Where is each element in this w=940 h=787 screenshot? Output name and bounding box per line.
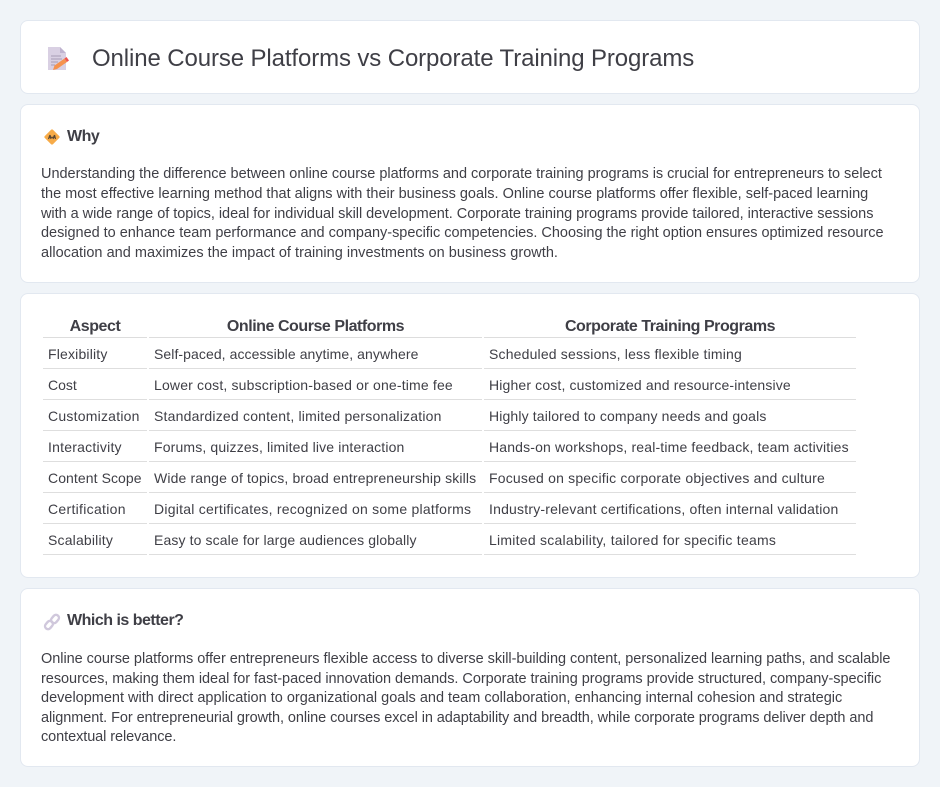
comparison table: Higher cost, customized and resource-intensive xyxy=(489,377,791,393)
comparison table: Customization xyxy=(48,408,140,424)
comparison table: Industry-relevant certifications, often internal validation xyxy=(489,501,839,517)
comparison table: Cost xyxy=(48,377,77,393)
comparison table: Interactivity xyxy=(48,439,122,455)
comparison table: Flexibility xyxy=(48,346,108,362)
comparison table: Focused on specific corporate objectives and culture xyxy=(489,470,825,486)
text block: which is better xyxy=(41,651,890,745)
panel: header xyxy=(20,20,920,94)
comparison table: Highly tailored to company needs and goals xyxy=(489,408,766,424)
comparison table: Wide range of topics, broad entrepreneurship skills xyxy=(154,470,476,486)
text block: which is better: alignment. For entrepreneurial growth, online courses excel in adaptability and breadth, while corporate programs deliver depth and xyxy=(41,710,873,726)
comparison table: Scheduled sessions, less flexible timing xyxy=(489,346,742,362)
text block: why: Understanding the difference between online course platforms and corporate training programs is crucial for entrepreneurs to select xyxy=(41,166,882,182)
title: Online Course Platforms vs Corporate Training Programs xyxy=(92,45,694,72)
comparison table: Online Course Platforms xyxy=(227,318,404,335)
comparison table: Hands-on workshops, real-time feedback, team activities xyxy=(489,439,849,455)
comparison table: Lower cost, subscription-based or one-time fee xyxy=(154,377,453,393)
comparison table: Content Scope xyxy=(48,470,142,486)
panel: comparison table xyxy=(20,293,920,578)
comparison table: Aspect xyxy=(70,318,120,335)
text block: why: allocation and maximizes the impact of training investments on business growth. xyxy=(41,245,558,261)
panel: why xyxy=(20,104,920,283)
comparison table: Limited scalability, tailored for specific teams xyxy=(489,532,776,548)
text block: why: with a wide range of topics, ideal for individual skill development. Corporate training programs provide tailored, interactive sessions xyxy=(41,206,873,222)
text block: which is better: resources, making them ideal for fast-paced innovation demands. Corporate training programs provide structured, company-specific xyxy=(41,671,881,687)
comparison table: Self-paced, accessible anytime, anywhere xyxy=(154,346,418,362)
comparison table: Corporate Training Programs xyxy=(565,318,775,335)
text block: why: the most effective learning method that aligns with their business goals. Online course platforms offer flexible, self-paced learning xyxy=(41,186,868,202)
comparison table: Certification xyxy=(48,501,126,517)
icon: diamond sign xyxy=(44,129,60,145)
comparison table: Easy to scale for large audiences globally xyxy=(154,532,417,548)
comparison table: Scalability xyxy=(48,532,113,548)
text block: why: designed to enhance team performance and company-specific competencies. Choosing the right option ensures optimized resource xyxy=(41,225,884,241)
heading: why: Why xyxy=(67,128,99,145)
icon: document with pencil xyxy=(48,47,69,70)
text block: which is better: development with direct application to organizational goals and team collaboration, enhancing internal cohesion and strategic xyxy=(41,690,842,706)
comparison table: Digital certificates, recognized on some platforms xyxy=(154,501,471,517)
panel: which is better xyxy=(20,588,920,767)
comparison table: Standardized content, limited personalization xyxy=(154,408,442,424)
icon: link xyxy=(44,614,60,630)
text block: which is better: contextual relevance. xyxy=(41,729,176,745)
text block: which is better: Online course platforms offer entrepreneurs flexible access to diverse skill-building content, personalized learning paths, and scalable xyxy=(41,651,890,667)
heading: which is better: Which is better? xyxy=(67,612,183,629)
text block: why xyxy=(41,166,884,261)
comparison table: Forums, quizzes, limited live interaction xyxy=(154,439,404,455)
